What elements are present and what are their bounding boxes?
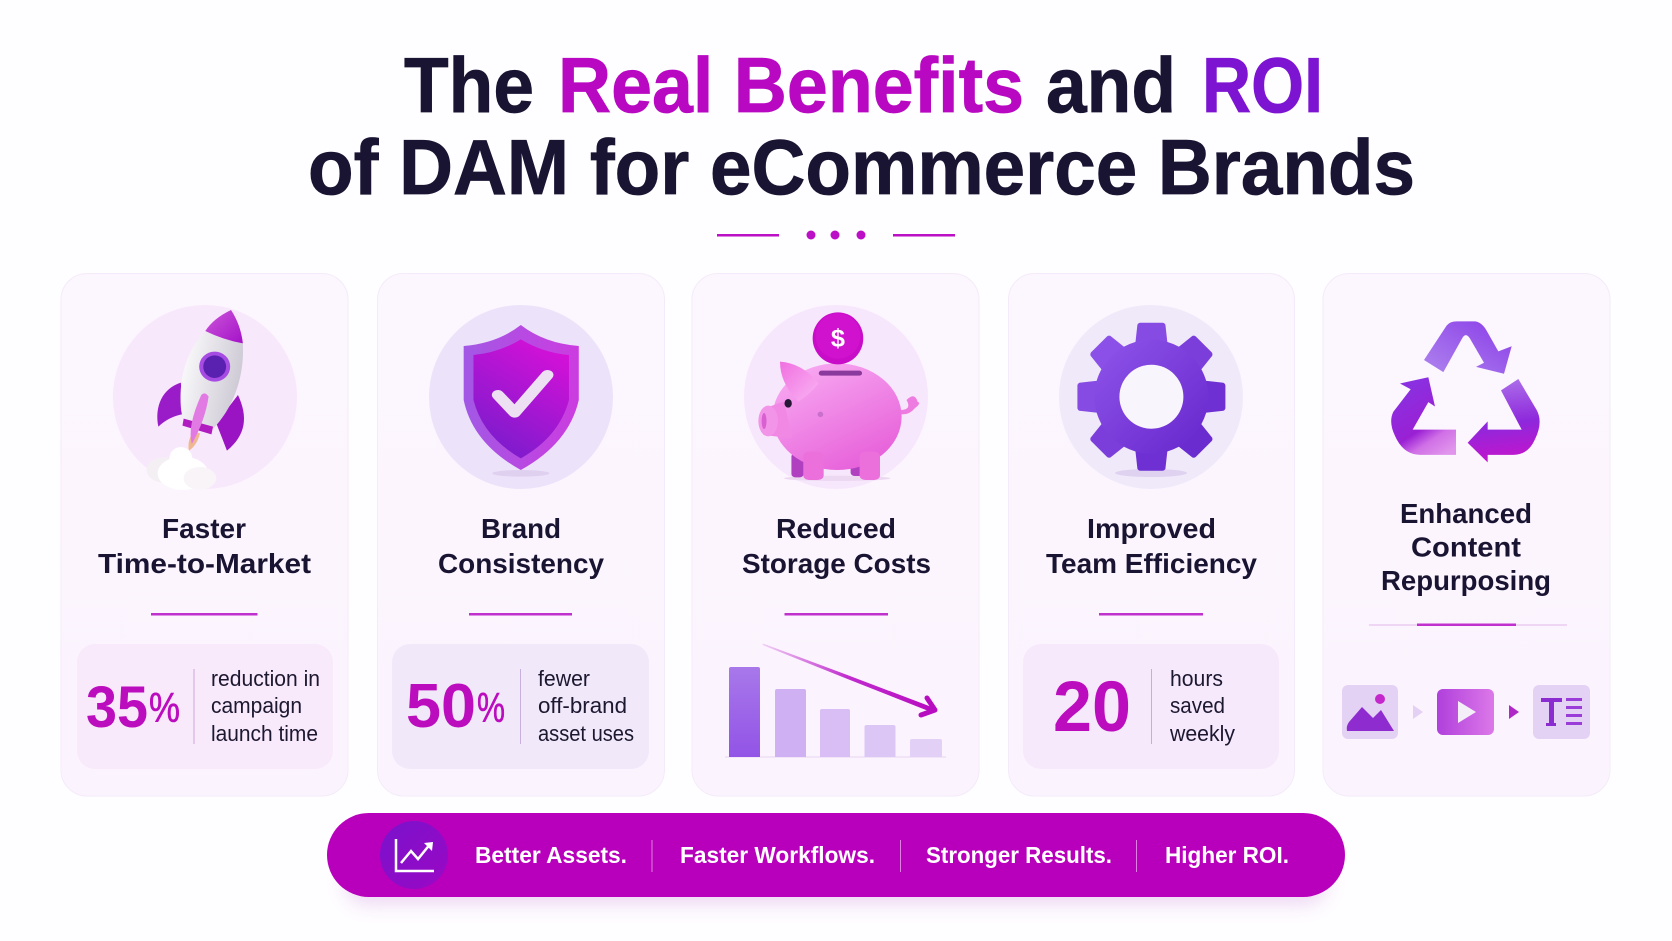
heading xyxy=(98,513,311,579)
banner: Stronger Results. xyxy=(926,842,1112,868)
icon: text document xyxy=(1533,685,1590,739)
banner xyxy=(327,813,1345,904)
icon: piggy bank xyxy=(744,305,928,489)
stat: 50%: off-brand xyxy=(538,693,627,718)
stat: 35% xyxy=(77,644,333,769)
panel: improved team efficiency xyxy=(1008,274,1294,796)
title divider xyxy=(717,230,955,240)
stat: 35%: 35 xyxy=(86,675,148,740)
stat: 50%: asset uses xyxy=(538,721,634,746)
title xyxy=(308,41,1415,211)
icon: image xyxy=(1342,685,1398,739)
heading: Repurposing xyxy=(1381,565,1551,596)
heading: Improved xyxy=(1087,513,1216,544)
stat: 20 hours: saved xyxy=(1170,693,1225,718)
arrow: downward trend xyxy=(762,644,935,715)
icon: shield xyxy=(429,305,613,489)
title: The xyxy=(404,41,534,129)
icon: gear xyxy=(1059,305,1243,489)
panel: faster time-to-market xyxy=(61,274,348,796)
heading: Content xyxy=(1411,532,1521,562)
arrow: image to video xyxy=(1413,705,1423,719)
stat: 20 hours xyxy=(1023,644,1279,769)
icon: piggy bank: $ xyxy=(831,325,845,352)
stat: 50%: % xyxy=(477,684,505,731)
stat: 50%: fewer xyxy=(538,666,590,691)
icon: recycle arrows xyxy=(1391,321,1540,462)
heading xyxy=(1046,513,1257,579)
stat: 20 hours: weekly xyxy=(1169,721,1235,746)
stat: 35%: % xyxy=(149,684,180,731)
panel: brand consistency xyxy=(378,274,664,796)
heading xyxy=(1381,498,1551,596)
heading: Faster xyxy=(162,513,246,544)
icon: video xyxy=(1437,689,1494,735)
stat: 50% xyxy=(392,644,649,769)
heading: Consistency xyxy=(438,548,604,579)
heading: Enhanced xyxy=(1400,498,1532,529)
stat: 35%: campaign xyxy=(211,693,302,718)
stat: 20 hours: hours xyxy=(1170,666,1223,691)
stat: 50%: 50 xyxy=(406,672,476,741)
heading: Reduced xyxy=(776,513,896,544)
title: Real Benefits xyxy=(558,41,1024,129)
title: ROI xyxy=(1202,41,1323,129)
banner: Better Assets. xyxy=(475,842,627,868)
banner: Higher ROI. xyxy=(1165,842,1289,868)
title: of DAM for eCommerce Brands xyxy=(308,123,1415,211)
heading: Storage Costs xyxy=(742,548,931,579)
bar chart: falling storage costs xyxy=(725,644,946,758)
title: and xyxy=(1046,41,1176,129)
stat: 35%: launch time xyxy=(211,721,318,746)
stat: 20 hours: 20 xyxy=(1053,668,1131,747)
heading xyxy=(438,513,604,579)
banner: Faster Workflows. xyxy=(680,842,875,868)
heading: Time-to-Market xyxy=(98,548,311,579)
heading xyxy=(742,513,931,579)
stat: 35%: reduction in xyxy=(211,666,320,691)
arrow: video to text xyxy=(1509,705,1519,719)
icon: growth chart xyxy=(380,821,448,889)
panel: enhanced content repurposing xyxy=(1323,274,1610,796)
icon: rocket xyxy=(113,305,297,490)
heading: Team Efficiency xyxy=(1046,548,1257,579)
panel: reduced storage costs xyxy=(692,274,979,796)
heading: Brand xyxy=(481,513,561,544)
